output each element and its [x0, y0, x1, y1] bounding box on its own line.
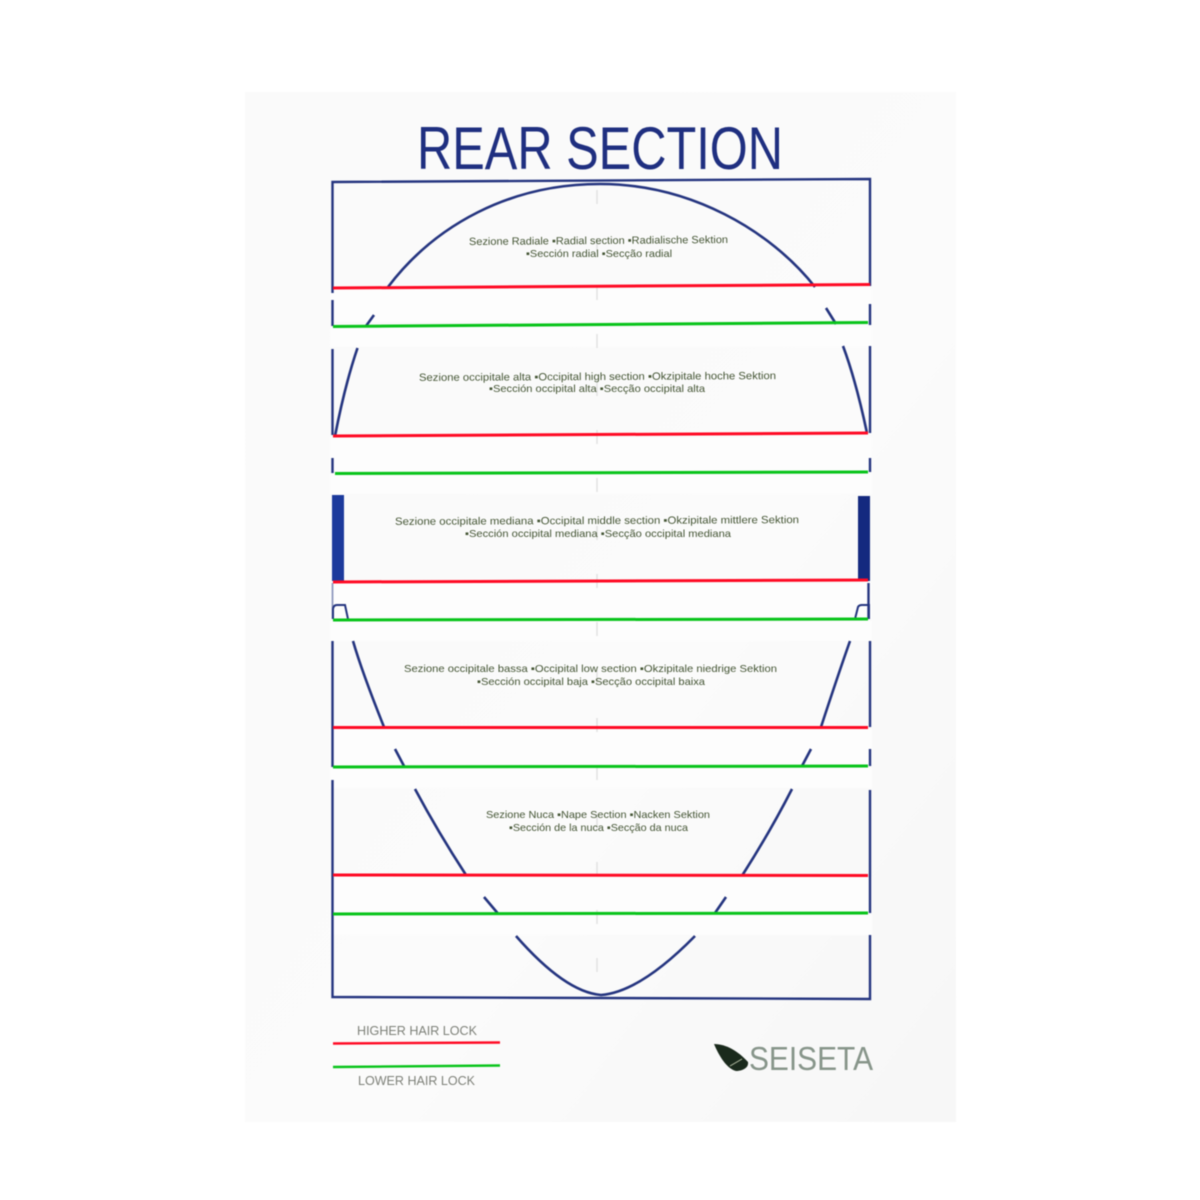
legend: lower hair lock: LOWER HAIR LOCK [358, 1074, 476, 1088]
green lower lock lines [333, 322, 868, 914]
left blue ear bar [332, 495, 344, 581]
red higher lock lines [333, 284, 870, 876]
logo: Seiseta: SEISETA [749, 1040, 873, 1077]
icon: leaf [714, 1044, 748, 1071]
text: occipital high section: ▪Sección occipital alta ▪Secção occipital alta [489, 383, 705, 395]
text: occipital middle section [395, 514, 799, 540]
text: occipital high section: Sezione occipitale alta ▪Occipital high section ▪Okzipitale hoche Sektion [419, 370, 776, 384]
right neck tab [855, 605, 869, 619]
white gap strips [330, 289, 872, 935]
text: occipital middle section: Sezione occipitale mediana ▪Occipital middle section ▪Okzipitale mittlere Sektion [395, 514, 799, 528]
text: radial section: Sezione Radiale ▪Radial section ▪Radialische Sektion [469, 234, 728, 248]
panel: paper sheet [245, 92, 956, 1122]
text: occipital high section [419, 370, 776, 395]
text: occipital middle section: ▪Sección occipital mediana ▪Secção occipital mediana [465, 528, 731, 540]
text: nape section: Sezione Nuca ▪Nape Section ▪Nacken Sektion [486, 809, 710, 821]
center fold dashed guide [596, 190, 598, 1000]
title: REAR SECTION [417, 115, 783, 182]
text: nape section: ▪Sección de la nuca ▪Secção da nuca [509, 822, 688, 834]
text: radial section: ▪Sección radial ▪Secção radial [526, 248, 672, 260]
text: occipital low section [404, 663, 777, 688]
right blue ear bar [858, 496, 870, 581]
text: radial section [469, 234, 728, 260]
section grid frame [332, 179, 870, 999]
text: occipital low section: Sezione occipitale bassa ▪Occipital low section ▪Okzipitale niedrige Sektion [404, 663, 777, 675]
text: occipital low section: ▪Sección occipital baja ▪Secção occipital baixa [477, 676, 705, 688]
legend: higher hair lock: HIGHER HAIR LOCK [357, 1024, 478, 1038]
left neck tab [333, 605, 348, 619]
text: nape section [486, 809, 710, 834]
head outline curve [335, 184, 867, 995]
